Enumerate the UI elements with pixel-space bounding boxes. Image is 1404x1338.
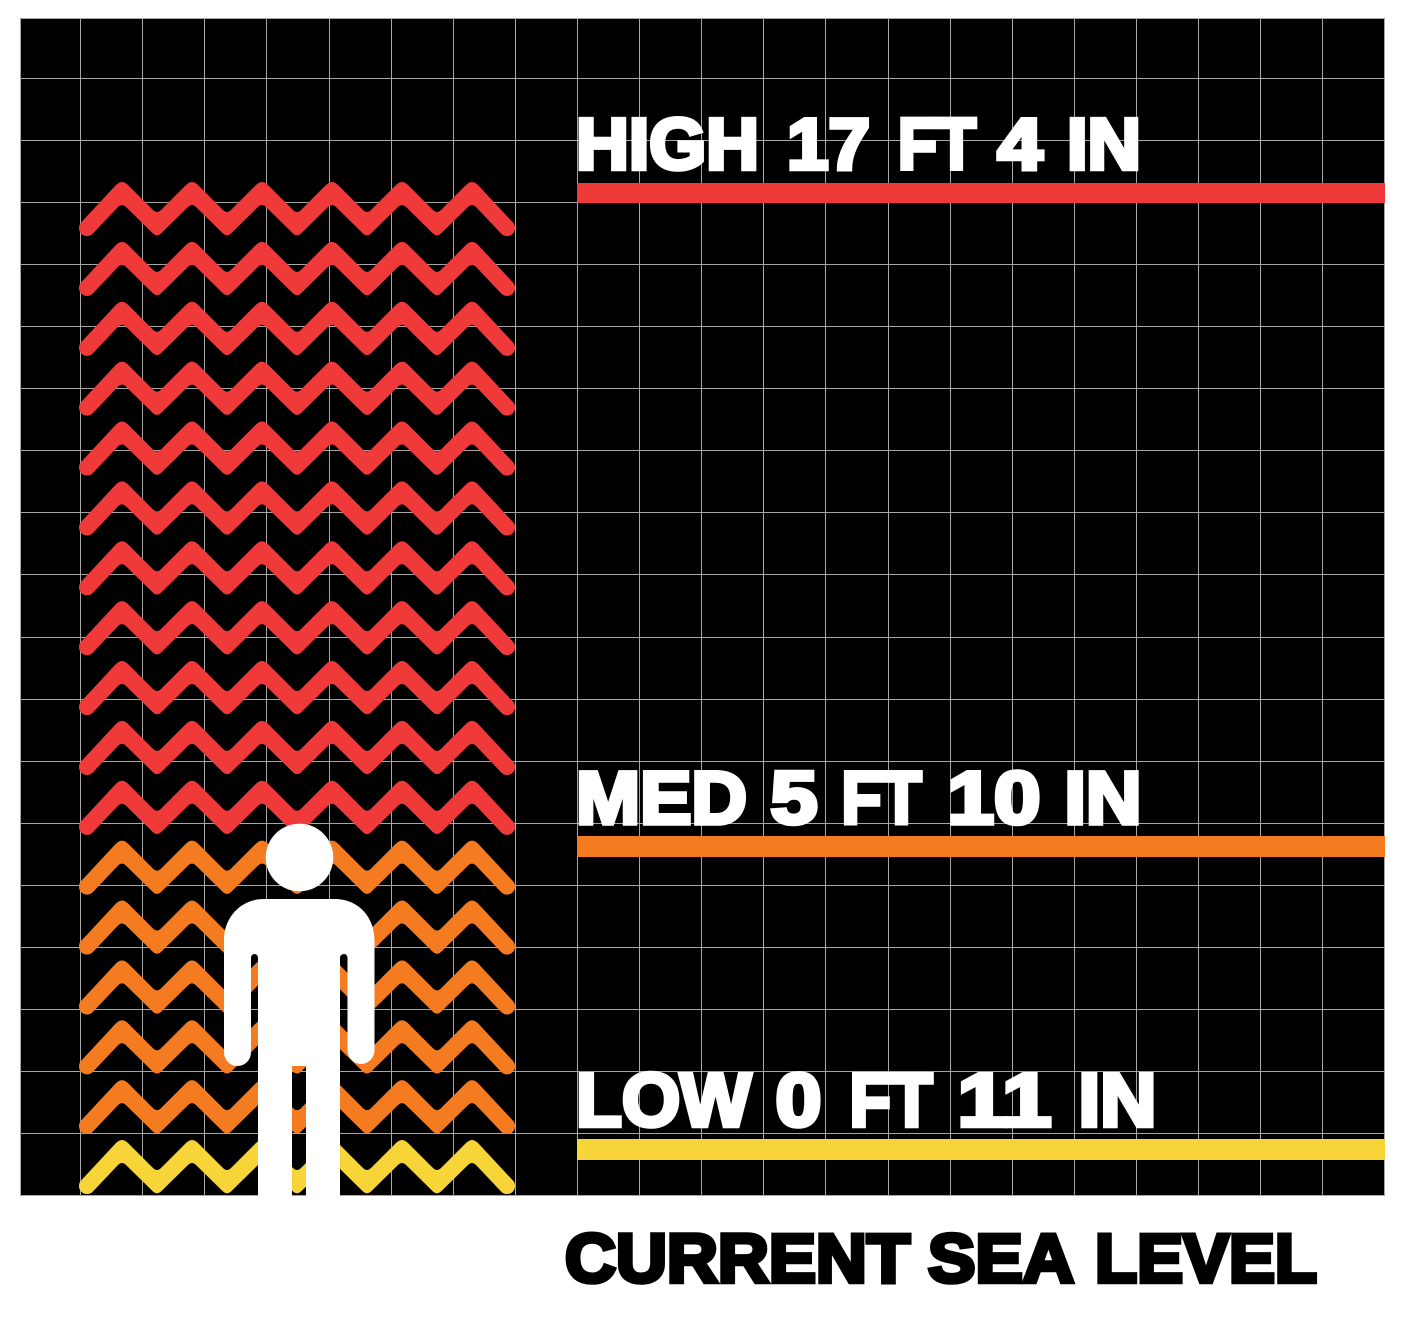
label: low scenario: IN — [1078, 1058, 1156, 1142]
waves: high scenario (red) — [79, 182, 515, 835]
label: medium scenario: FT — [842, 756, 922, 840]
label: medium scenario: MED — [576, 756, 747, 840]
label: high scenario: FT — [898, 105, 976, 185]
baseline label: current sea level: CURRENT — [565, 1220, 910, 1297]
label: high scenario: 4 — [998, 105, 1042, 185]
label: high scenario: HIGH — [576, 105, 759, 185]
label: high scenario: 17 — [787, 105, 870, 185]
baseline label: current sea level: SEA — [928, 1220, 1073, 1297]
bar: low level — [577, 1139, 1385, 1160]
bar: high level — [577, 183, 1385, 203]
label: medium scenario: 10 — [948, 756, 1040, 840]
baseline label: current sea level: LEVEL — [1095, 1220, 1317, 1297]
label: high scenario: IN — [1067, 105, 1141, 185]
label: low scenario: 0 — [776, 1058, 822, 1142]
waves: low scenario (yellow) — [79, 1140, 515, 1194]
label: low scenario: FT — [850, 1058, 932, 1142]
label: medium scenario: 5 — [770, 756, 818, 840]
bar: medium level — [577, 836, 1385, 857]
icon: human figure for scale — [224, 824, 374, 1197]
label: low scenario: 11 — [958, 1058, 1052, 1142]
waves: medium scenario (orange) — [79, 841, 515, 1134]
label: low scenario: LOW — [576, 1058, 751, 1142]
label: medium scenario: IN — [1064, 756, 1142, 840]
